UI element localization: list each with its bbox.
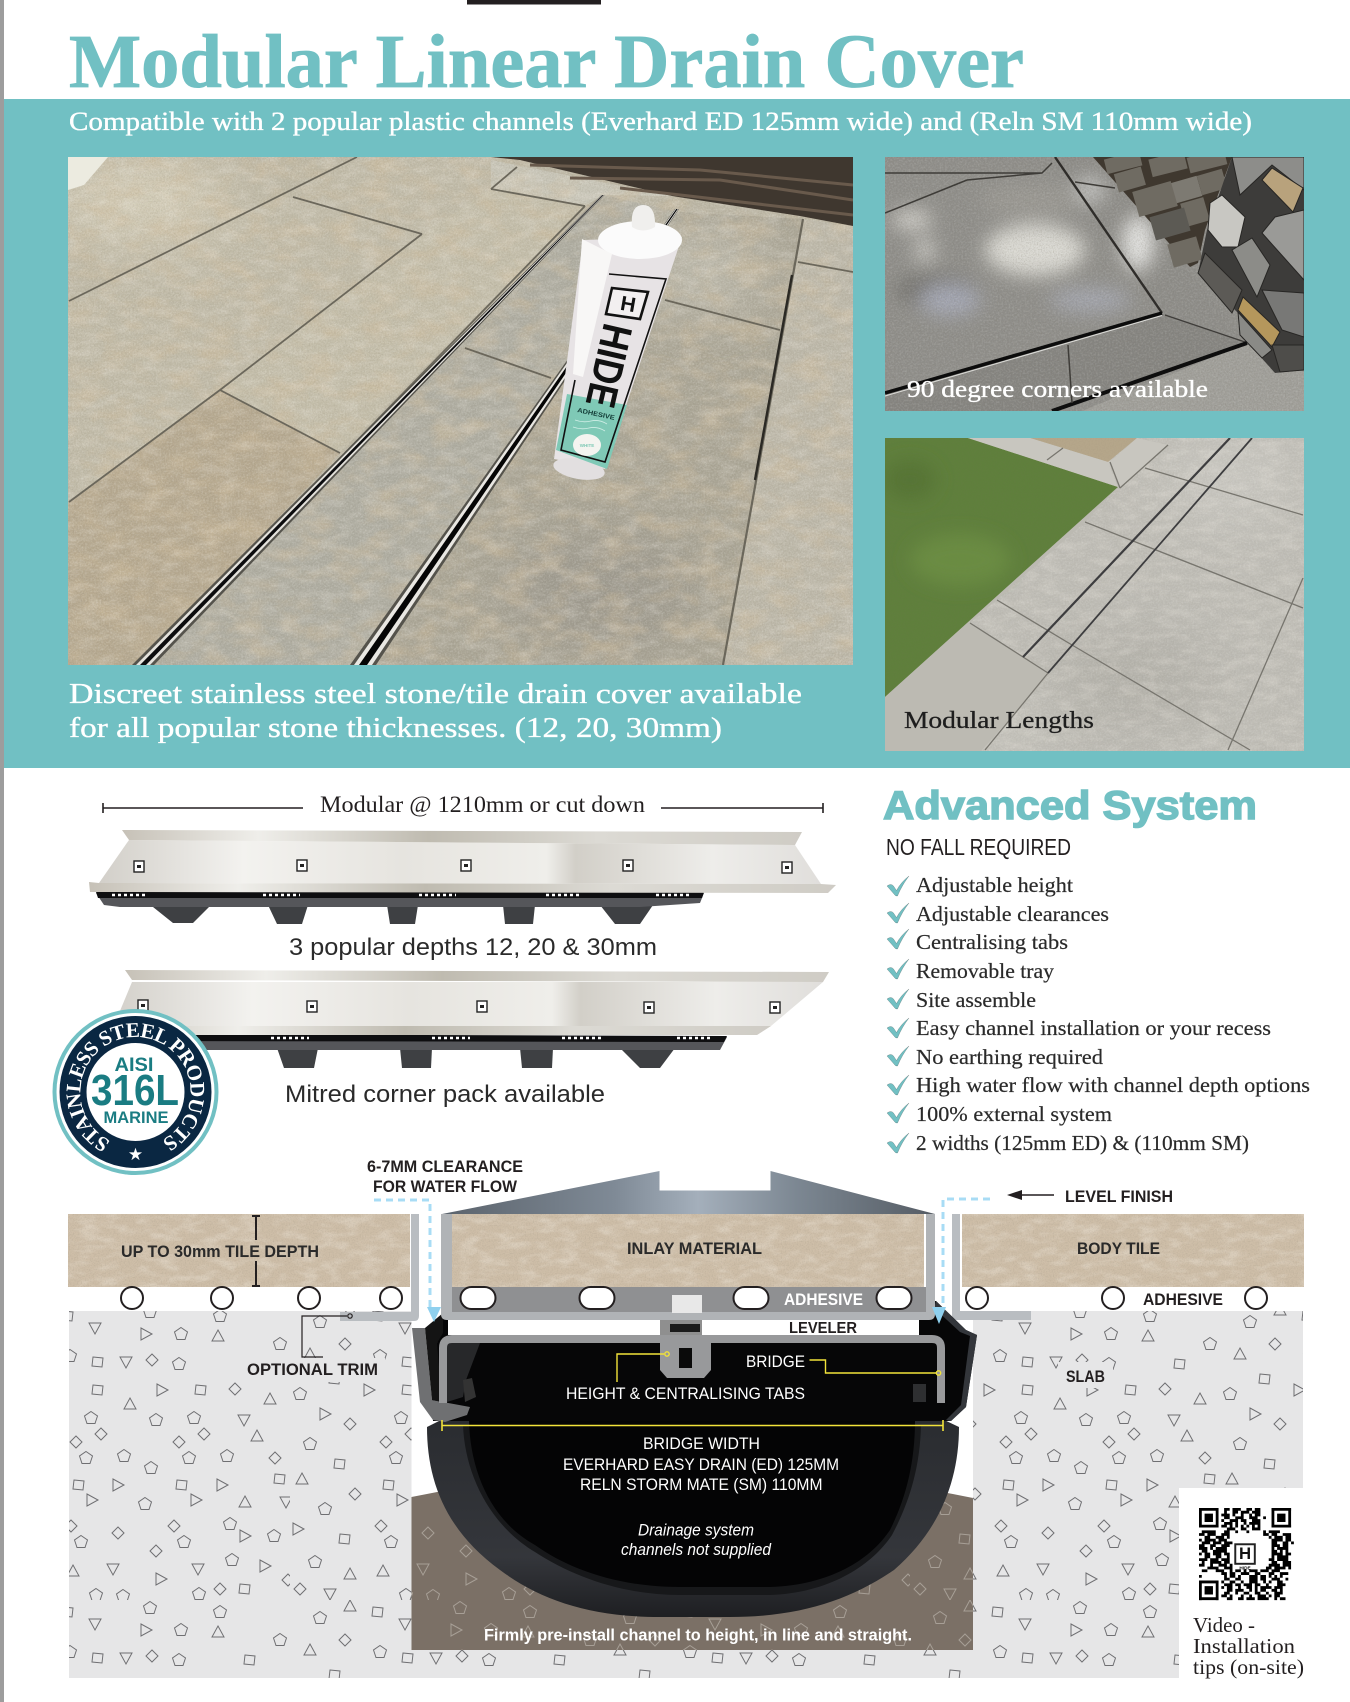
label: level finish: LEVEL FINISH — [1065, 1188, 1173, 1206]
label: clearance: 6-7MM CLEARANCE — [367, 1158, 523, 1176]
bedding ground — [412, 1469, 973, 1650]
water flow dashes — [374, 1199, 990, 1308]
left page edge — [0, 0, 4, 1702]
label: bridge width: RELN STORM MATE (SM) 110MM — [580, 1476, 822, 1494]
badge: AISI 316L marine: MARINE — [104, 1108, 168, 1127]
label: tile depth: UP TO 30mm TILE DEPTH — [121, 1243, 319, 1261]
photo: modular lengths — [884, 438, 1304, 751]
label: height and centralising tabs: HEIGHT & CENTRALISING TABS — [566, 1385, 805, 1403]
optional trim right — [952, 1214, 1031, 1320]
feature checklist: Centralising tabs — [916, 930, 1068, 954]
caption: video installation tips: tips (on-site) — [1193, 1655, 1304, 1679]
adhesive tube: WHITE — [580, 443, 594, 448]
label: inlay material: INLAY MATERIAL — [627, 1240, 762, 1258]
product: mitred drain cover — [105, 970, 829, 1068]
feature checklist: No earthing required — [916, 1045, 1104, 1069]
icon: QR code: H — [1239, 1544, 1251, 1563]
label: tile depth — [121, 1216, 319, 1286]
badge: AISI 316L marine: AISI — [114, 1055, 154, 1076]
stone wall — [491, 157, 853, 226]
caption: video installation tips: Video - — [1193, 1613, 1255, 1637]
label: adhesive outer: ADHESIVE — [1143, 1291, 1223, 1309]
icon: QR code — [1199, 1508, 1294, 1600]
badge: AISI 316L marine: STAINLESS STEEL PRODUCTS — [66, 1023, 204, 1151]
bridge width dimension — [442, 1420, 943, 1431]
label: bridge: BRIDGE — [746, 1353, 805, 1371]
label: clearance: FOR WATER FLOW — [373, 1178, 517, 1196]
feature checklist: 2 widths (125mm ED) & (110mm SM) — [916, 1131, 1249, 1155]
drain cover — [441, 1171, 935, 1320]
body tile right — [962, 1214, 1304, 1287]
label: bridge width — [563, 1435, 839, 1494]
note: channels not supplied: Drainage system — [638, 1522, 754, 1540]
caption: discreet stainless steel: Discreet stainless steel stone/tile drain cover available — [69, 678, 802, 710]
drain lines — [132, 195, 679, 665]
photo: 90 degree corners — [885, 149, 1304, 411]
feature checklist: Site assemble — [916, 988, 1036, 1012]
top tab — [467, 0, 601, 4]
label: clearance — [367, 1158, 523, 1196]
caption: video installation tips: Installation — [1193, 1634, 1296, 1658]
channel recess — [412, 1311, 973, 1501]
adhesive tube: HIDE — [577, 320, 641, 412]
note: pre-install channel: Firmly pre-install channel to height, in line and straight. — [484, 1626, 912, 1644]
flow arrows — [427, 1307, 946, 1324]
label: optional trim: OPTIONAL TRIM — [247, 1361, 378, 1379]
feature checklist — [887, 873, 1310, 1155]
slab — [69, 1311, 1303, 1678]
caption: discreet stainless steel — [69, 678, 802, 744]
subheading: no fall required: NO FALL REQUIRED — [886, 834, 1071, 860]
caption: mitred corner: Mitred corner pack available — [285, 1081, 605, 1108]
caption: modular lengths: Modular Lengths — [904, 708, 1094, 734]
label: bridge width: BRIDGE WIDTH — [643, 1435, 760, 1453]
note: channels not supplied — [621, 1522, 772, 1559]
height and centralising tab — [660, 1343, 711, 1378]
title: Modular Linear Drain Cover — [69, 20, 1024, 104]
body tile left — [68, 1214, 410, 1287]
subtitle: Compatible with 2 popular plastic channels (Everhard ED 125mm wide) and (Reln SM 110mm wide) — [69, 107, 1252, 136]
feature checklist: Adjustable height — [916, 873, 1073, 897]
caption: video installation tips — [1193, 1613, 1304, 1679]
product: top drain cover — [89, 830, 836, 924]
drainage channel — [412, 1301, 977, 1617]
label: level finish — [1007, 1188, 1173, 1206]
feature checklist: Easy channel installation or your recess — [916, 1016, 1271, 1040]
diagram: drain cross-section — [68, 1158, 1304, 1678]
feature checklist: Adjustable clearances — [916, 902, 1109, 926]
label: bridge width: EVERHARD EASY DRAIN (ED) 125MM — [563, 1456, 839, 1474]
heading: advanced system: Advanced System — [883, 784, 1257, 828]
label: slab: SLAB — [1066, 1368, 1105, 1386]
label: adhesive inner: ADHESIVE — [784, 1291, 863, 1309]
label: body tile: BODY TILE — [1077, 1240, 1160, 1258]
adhesive tube — [552, 205, 682, 483]
feature checklist: Removable tray — [916, 959, 1055, 983]
label: leveler: LEVELER — [789, 1320, 857, 1337]
adhesive beads — [121, 1287, 1267, 1309]
tab leader — [617, 1352, 669, 1382]
icon: QR code: HIDE — [1239, 1565, 1251, 1571]
badge: AISI 316L marine: 316L — [91, 1066, 179, 1115]
bridge leader — [810, 1360, 941, 1375]
caption: depths: 3 popular depths 12, 20 & 30mm — [289, 934, 657, 961]
caption: discreet stainless steel: for all popular stone thicknesses. (12, 20, 30mm) — [69, 712, 722, 744]
label: optional trim — [247, 1314, 378, 1379]
adhesive tube: H — [619, 292, 638, 317]
dimension: modular length: Modular @ 1210mm or cut down — [320, 792, 646, 817]
bridge — [443, 1339, 941, 1403]
panel: video QR — [1179, 1488, 1304, 1680]
panel: teal band — [4, 99, 1350, 768]
adhesive tube: ADHESIVE — [577, 407, 616, 422]
note: channels not supplied: channels not supplied — [621, 1541, 772, 1559]
feature checklist: High water flow with channel depth options — [916, 1073, 1310, 1097]
caption: 90 degree corners: 90 degree corners available — [907, 377, 1208, 403]
badge: AISI 316L marine: ★ — [128, 1145, 143, 1165]
feature checklist: 100% external system — [916, 1102, 1112, 1126]
dimension: modular length — [103, 792, 823, 817]
photo: main paving with drain and adhesive tube — [50, 157, 853, 665]
leveler — [448, 1320, 919, 1335]
optional trim left — [340, 1214, 419, 1321]
